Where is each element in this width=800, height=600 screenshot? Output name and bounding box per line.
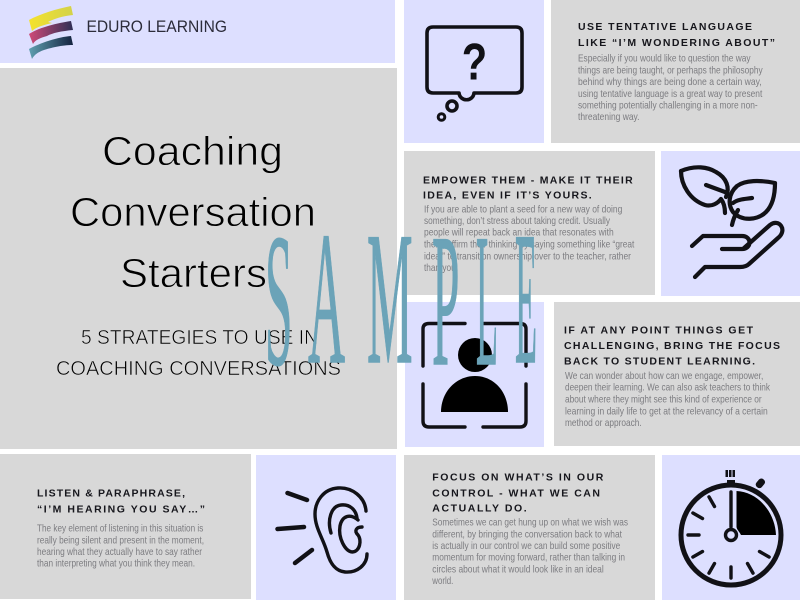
body text: [37, 524, 204, 570]
body text: things are being taught, or perhaps the philosophy: [578, 65, 763, 76]
watermark: SAMPLE: M: [367, 194, 413, 404]
body text: Sometimes we can get hung up on what we wish was: [432, 517, 628, 528]
watermark: SAMPLE: P: [432, 196, 459, 406]
icon: thought bubble with question mark: ?: [462, 32, 487, 91]
heading: “I’M HEARING YOU SAY…”: [37, 503, 205, 515]
body text: behind why things are being done a certain way,: [578, 77, 762, 88]
body text: something potentially challenging in a more non-: [578, 100, 758, 112]
body text: [432, 517, 628, 587]
icon: seedling in a hand: [681, 167, 782, 277]
heading: LISTEN & PARAPHRASE,: [37, 488, 185, 500]
heading: [564, 324, 780, 368]
panel: student learning: [554, 302, 800, 446]
heading: ACTUALLY DO.: [432, 503, 527, 515]
icon: person in focus frame: [423, 324, 526, 427]
body text: different, by bringing the conversation back to what: [432, 529, 622, 540]
body text: The key element of listening in this situation is: [37, 524, 203, 535]
watermark: SAMPLE: E: [515, 192, 537, 404]
body text: them, affirm their thinking by saying something like “great: [424, 240, 634, 251]
watermark: SAMPLE: A: [308, 194, 345, 404]
heading: CONTROL - WHAT WE CAN: [432, 487, 600, 499]
heading: FOCUS ON WHAT’S IN OUR: [432, 472, 604, 484]
panel: tentative language: [551, 0, 800, 143]
heading: EMPOWER THEM - MAKE IT THEIR: [423, 174, 633, 186]
body text: people will repeat back an idea that resonates with: [424, 228, 614, 239]
body text: than interpreting what you think they mean.: [37, 559, 195, 570]
brand name: EDURO LEARNING: [86, 18, 227, 36]
main title: Starters: [120, 250, 267, 296]
main title: Conversation: [70, 189, 316, 235]
body text: is actually in our control we can build some positive: [432, 541, 621, 552]
panel: logo header: [0, 0, 395, 63]
panel: plant icon: [661, 151, 800, 296]
panel: empower them: [404, 151, 655, 295]
panel: listen and paraphrase: [0, 454, 251, 599]
icon: stopwatch: [681, 470, 781, 585]
body text: about where they might see this kind of experience or: [565, 394, 762, 405]
heading: [432, 472, 604, 515]
heading: LIKE “I’M WONDERING ABOUT”: [578, 37, 775, 49]
body text: [565, 371, 771, 429]
icon: thought bubble with question mark: [427, 27, 522, 120]
icon: Eduro ribbon logo: [29, 6, 73, 59]
body text: using tentative language is a great way to present: [578, 89, 762, 100]
subtitle: 5 STRATEGIES TO USE IN: [81, 327, 318, 349]
icon: listening ear: [278, 488, 367, 572]
body text: If you are able to plant a seed for a new way of doing: [424, 204, 623, 216]
heading: USE TENTATIVE LANGUAGE: [578, 21, 752, 33]
heading: [423, 174, 633, 202]
watermark: SAMPLE: [265, 192, 537, 406]
body text: [424, 204, 634, 274]
body text: [578, 54, 763, 123]
heading: [37, 488, 205, 515]
watermark: SAMPLE: S: [265, 196, 292, 406]
body text: something, don’t stress about taking credit. Usually: [424, 216, 611, 227]
panel: stopwatch icon: [662, 455, 800, 600]
body text: threatening way.: [578, 112, 640, 123]
body text: method or approach.: [565, 418, 642, 429]
body text: momentum for moving forward, rather than talking in: [432, 553, 625, 564]
heading: IF AT ANY POINT THINGS GET: [564, 324, 754, 336]
panel: person icon: [405, 302, 544, 447]
main title: [70, 128, 316, 296]
body text: We can wonder about how can we engage, empower,: [565, 371, 763, 382]
watermark: SAMPLE: L: [476, 194, 498, 406]
main title: Coaching: [102, 128, 283, 174]
panel: question icon: [404, 0, 544, 143]
panel: title: [0, 68, 397, 449]
body text: hearing what they actually have to say rather: [37, 547, 202, 558]
panel: ear icon: [256, 455, 396, 600]
subtitle: COACHING CONVERSATIONS: [56, 358, 341, 380]
body text: really being silent and present in the moment,: [37, 535, 204, 546]
body text: Especially if you would like to question the way: [578, 54, 751, 64]
heading: [578, 21, 775, 49]
panel: focus on control: [404, 455, 655, 600]
heading: IDEA, EVEN IF IT’S YOURS.: [423, 190, 592, 202]
body text: idea!” to transition ownership over to the teacher, rather: [424, 251, 632, 262]
heading: BACK TO STUDENT LEARNING.: [564, 356, 755, 368]
heading: CHALLENGING, BRING THE FOCUS: [564, 340, 780, 352]
body text: world.: [432, 576, 453, 587]
body text: circles about what it would look like in an ideal: [432, 564, 604, 575]
body text: than you.: [424, 263, 458, 274]
subtitle: [56, 327, 341, 380]
